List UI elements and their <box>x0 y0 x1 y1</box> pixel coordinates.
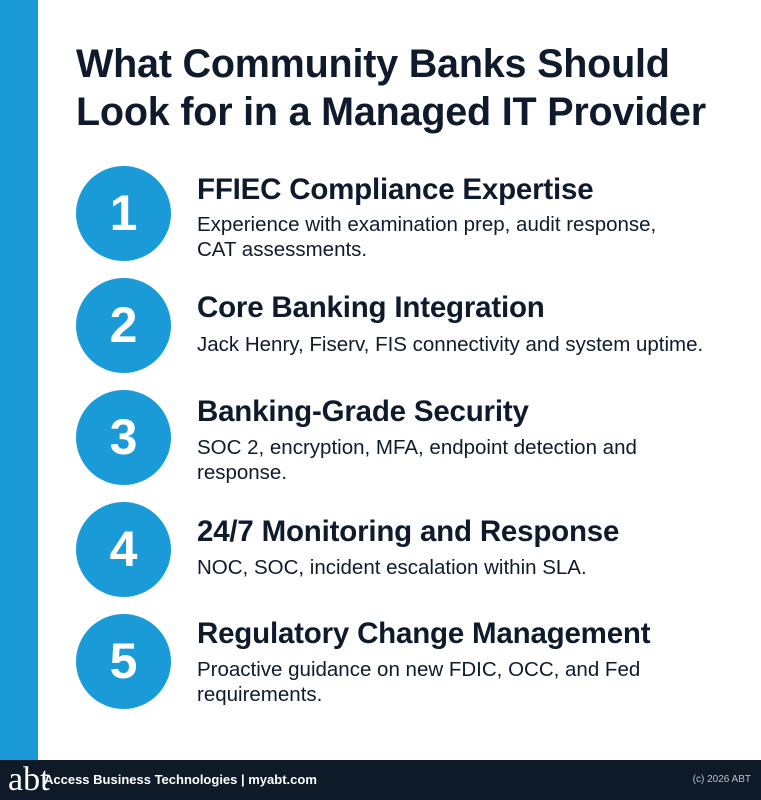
circle 1: 1 <box>110 185 137 241</box>
footer <box>0 760 761 800</box>
logo: abt <box>8 761 50 798</box>
heading 2: Core Banking Integration <box>197 291 545 324</box>
title: What Community Banks Should <box>76 42 670 86</box>
heading 1: FFIEC Compliance Expertise <box>197 173 593 206</box>
desc 2: Jack Henry, Fiserv, FIS connectivity and system uptime. <box>197 333 703 356</box>
heading 3: Banking-Grade Security <box>197 395 529 428</box>
circle 4: 4 <box>110 521 137 577</box>
circle 3 <box>76 390 171 485</box>
desc 3: SOC 2, encryption, MFA, endpoint detection and response. <box>197 436 637 484</box>
item 1 <box>76 166 656 261</box>
heading 5: Regulatory Change Management <box>197 617 650 650</box>
circle 2 <box>76 278 171 373</box>
footer text: Access Business Technologies | myabt.com <box>44 772 317 787</box>
desc 4: NOC, SOC, incident escalation within SLA. <box>197 556 587 579</box>
item 5 <box>76 614 650 709</box>
item 3 <box>76 390 637 485</box>
desc 1: Experience with examination prep, audit response, CAT assessments. <box>197 213 656 261</box>
circle 2: 2 <box>110 297 137 353</box>
circle 3: 3 <box>110 409 137 465</box>
item 2 <box>76 278 703 373</box>
circle 4 <box>76 502 171 597</box>
item 4 <box>76 502 619 597</box>
circle 5: 5 <box>110 633 137 689</box>
title <box>76 42 706 134</box>
circle 1 <box>76 166 171 261</box>
title: Look for in a Managed IT Provider <box>76 90 706 134</box>
circle 5 <box>76 614 171 709</box>
copyright: (c) 2026 ABT <box>693 774 751 785</box>
heading 4: 24/7 Monitoring and Response <box>197 515 619 548</box>
desc 5: Proactive guidance on new FDIC, OCC, and Fed requirements. <box>197 658 640 706</box>
